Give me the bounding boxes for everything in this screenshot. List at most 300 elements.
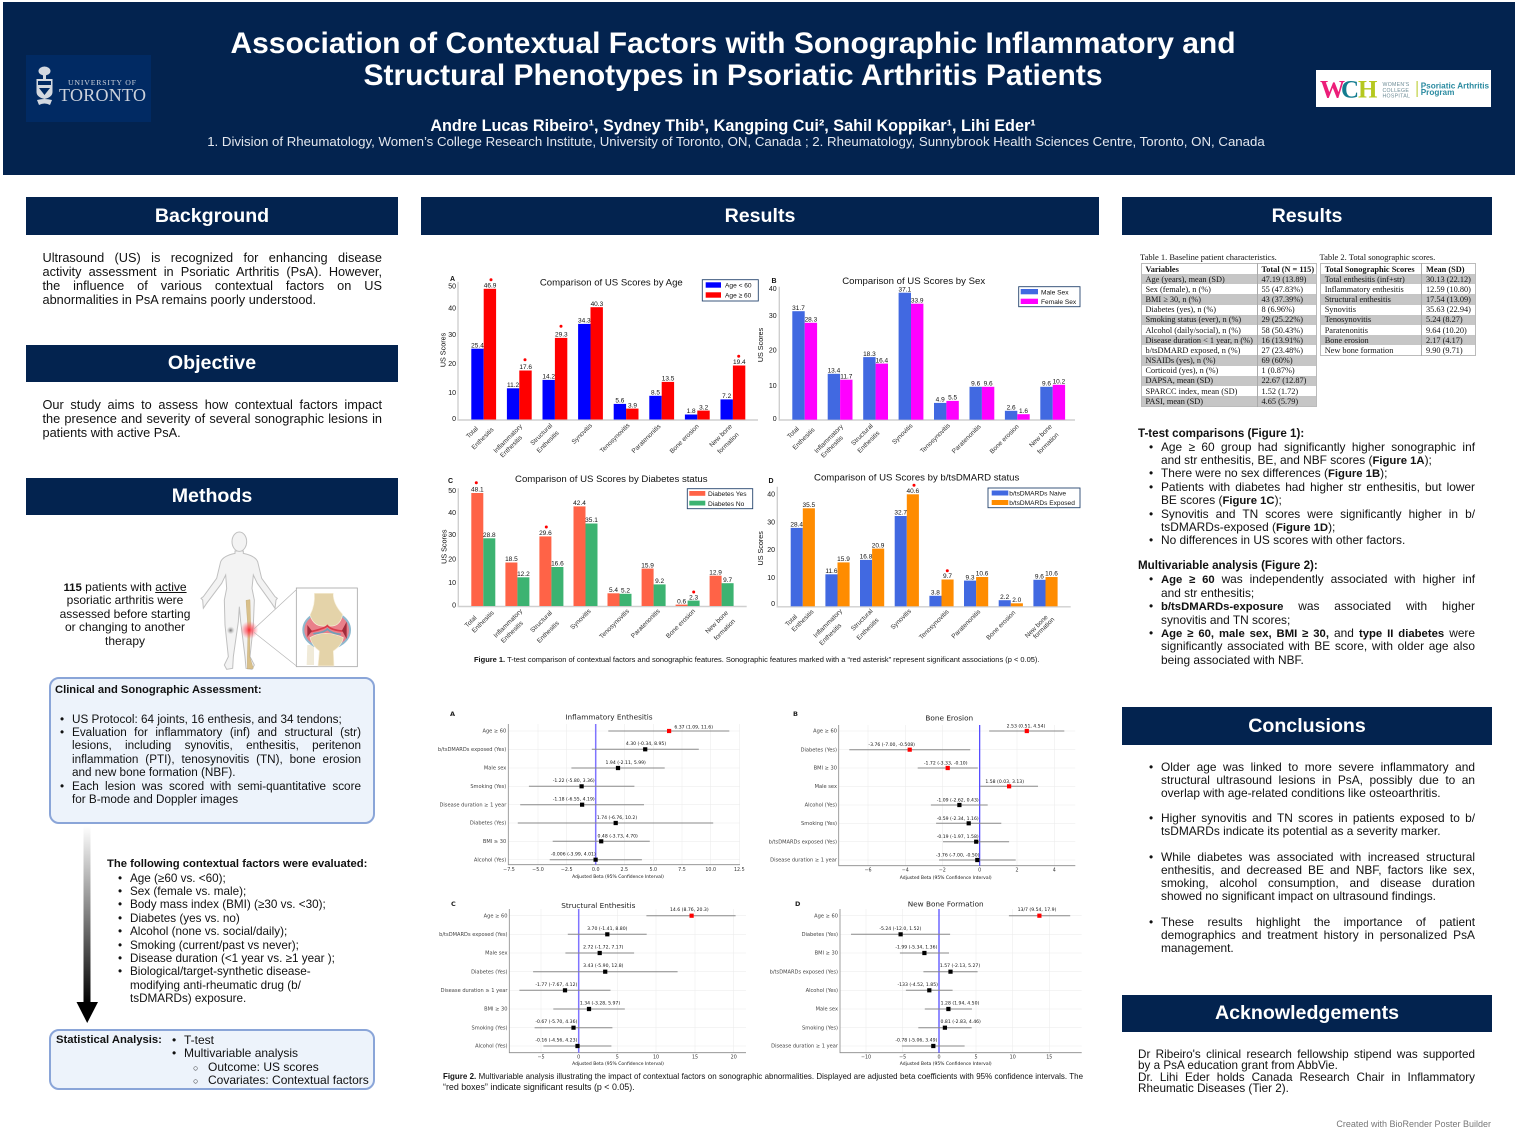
x ticks [537, 1054, 737, 1060]
zero reference line [979, 725, 981, 866]
grid [840, 909, 1082, 1053]
category labels: Enthesitis [820, 434, 845, 460]
axes [839, 725, 1075, 866]
table 1: baseline characteristics: Smoking status (ever), n (%) [1146, 315, 1241, 324]
assessment bullets: US Protocol: 64 joints, 16 enthesis, and 34 tendons; [72, 712, 342, 726]
heading: contextual factors: The following contextual factors were evaluated: [107, 858, 367, 870]
value labels: 9.6 [971, 380, 981, 388]
list: multivariable findings: Age ≥ 60 was independently associated with higher inf [1161, 572, 1475, 586]
y ticks: 0 [452, 416, 456, 423]
bar chart D: US scores by b/tsDMARD status [758, 472, 1080, 647]
value labels: 2.3 [689, 594, 698, 601]
title: Association of Contextual Factors with Sonographic Inflammatory and [230, 27, 1236, 60]
estimate labels: -0.16 (-4.56, 4.23) [535, 1038, 577, 1044]
panel letter: B [793, 710, 798, 718]
x ticks: 15 [692, 1054, 698, 1060]
legend: Male Sex [1041, 289, 1069, 296]
x ticks: −5.0 [532, 867, 544, 873]
heading: Conclusions [1122, 707, 1492, 745]
x axis label: Adjusted Beta (95% Confidence Interval) [572, 874, 664, 880]
row labels: b/tsDMARDs exposed (Yes) [769, 839, 837, 845]
x ticks: −7.5 [503, 867, 515, 873]
estimate labels: -3.76 (-7.00, -0.50) [936, 852, 980, 858]
value labels: 46.9 [484, 282, 497, 290]
chart title: Inflammatory Enthesitis [565, 712, 653, 722]
text: background: the influence of various contextual factors on US [42, 278, 382, 293]
non-significant estimates [901, 934, 951, 1046]
value labels [471, 282, 746, 415]
estimate labels: 6.37 (1.09, 11.6) [674, 724, 713, 730]
bars: age below 60 [471, 324, 733, 420]
category labels: Inflammatory [812, 607, 844, 639]
table 2: total sonographic scores: Mean (SD) [1426, 265, 1464, 274]
estimate labels [879, 907, 1057, 1044]
table 1: baseline characteristics: Variables [1146, 265, 1179, 274]
estimate labels: 3.70 (-1.41, 8.80) [587, 926, 628, 932]
authors: Andre Lucas Ribeiro¹, Sydney Thib¹, Kangping Cui², Sahil Koppikar¹, Lihi Eder¹ [430, 117, 1036, 135]
heading: Background [26, 197, 398, 235]
zero reference line [578, 909, 580, 1053]
table 1: baseline characteristics: SPARCC index, mean (SD) [1146, 387, 1237, 396]
estimate labels: -1.22 (-5.80, 3.36) [553, 778, 595, 784]
category labels: Structural [850, 422, 875, 447]
category labels [786, 422, 1061, 460]
table 1: baseline characteristics: Alcohol (daily/social), n (%) [1146, 326, 1241, 335]
y ticks: 30 [769, 313, 777, 320]
row labels: Age ≥ 60 [814, 913, 838, 919]
bars: b/tsDMARDs naive [791, 516, 1046, 606]
value labels: 29.6 [539, 530, 552, 537]
table 1: baseline characteristics [1140, 263, 1316, 407]
program name: Program [1421, 88, 1454, 97]
legend: b/tsDMARDs Naive [1009, 490, 1066, 498]
y ticks: 40 [769, 286, 777, 293]
category labels: Enthesitis [856, 616, 881, 642]
list: multivariable findings: significantly associated with BE score, with older age also [1161, 639, 1475, 653]
zero reference line [938, 909, 940, 1053]
category labels: New bone [1024, 614, 1050, 640]
list: conclusions: Older age was linked to more severe inflammatory and [1161, 760, 1475, 774]
row labels: Alcohol (Yes) [474, 857, 506, 863]
x ticks: −6 [864, 868, 872, 874]
list: contextual factors: modifying anti-rheumatic drug (b/ [130, 979, 301, 992]
value labels: 9.6 [984, 380, 993, 388]
y ticks [448, 488, 456, 610]
text: patient cohort: 115 patients with active [63, 580, 187, 594]
category labels [465, 422, 741, 459]
heading: Objective [26, 345, 398, 382]
y ticks: 50 [448, 283, 456, 290]
chart title: Comparison of US Scores by Sex [842, 276, 985, 287]
row labels: Diabetes (Yes) [471, 969, 508, 975]
table 1: baseline characteristics: 58 (50.43%) [1262, 326, 1303, 335]
list: conclusions: enthesitis, and decreased BE and NBF, factors like sex, [1161, 862, 1475, 876]
list: multivariable findings: Age ≥ 60, male sex, BMI ≥ 30, and type II diabetes were [1161, 626, 1475, 640]
value labels: 9.6 [1042, 380, 1051, 388]
inflammation glow [240, 621, 258, 639]
table 1: baseline characteristics: Age (years), mean (SD) [1146, 275, 1225, 284]
non-significant estimates [959, 805, 977, 860]
list: contextual factors: Diabetes (yes vs. no) [130, 912, 240, 925]
x ticks: 2 [1015, 868, 1019, 874]
hospital name: HOSPITAL [1382, 94, 1410, 100]
list: conclusions: structural ultrasound lesions in PsA, possibly due to an [1161, 772, 1475, 786]
row labels: Disease duration ≥ 1 year [770, 858, 838, 864]
row labels: b/tsDMARDs exposed (Yes) [439, 932, 508, 938]
value labels: 35.1 [585, 517, 598, 524]
category labels: Tenosynovitis [918, 608, 951, 641]
significant estimates [910, 731, 1027, 786]
value labels [792, 286, 1066, 415]
value labels: 18.5 [505, 556, 518, 563]
row labels: Age ≥ 60 [484, 913, 508, 919]
value labels: 42.4 [573, 500, 586, 507]
category labels: Enthesitis [792, 426, 817, 452]
value labels: 40.3 [591, 301, 604, 308]
value labels: 10.6 [976, 571, 989, 578]
value labels: 16.4 [875, 357, 889, 364]
bars: b/tsDMARDs exposed [803, 494, 1058, 606]
row labels: Smoking (Yes) [802, 1025, 838, 1031]
row labels: BMI ≥ 30 [484, 1007, 508, 1013]
y axis label: US Scores [438, 332, 448, 367]
category labels: Total [465, 425, 480, 440]
x ticks [864, 868, 1056, 874]
y ticks: 20 [448, 556, 456, 563]
value labels: 3.9 [628, 402, 637, 409]
panel: clinical and sonographic assessment [49, 677, 375, 824]
table 2: total sonographic scores: Tenosynovitis [1325, 315, 1371, 324]
x ticks: 5 [974, 1054, 978, 1060]
figure 2 caption: Figure 2. Multivariable analysis illustrating the impact of contextual factors on sonographic abnormalities. Displayed are adjusted beta coefficients with 95% confidence intervals. The [443, 1072, 1083, 1081]
y ticks: 0 [771, 601, 775, 608]
y ticks: 10 [767, 575, 775, 582]
estimate labels: 13/7 (9.54, 17.9) [1018, 907, 1057, 913]
row labels: BMI ≥ 30 [814, 766, 837, 772]
category labels: Bone erosion [989, 423, 1021, 455]
x ticks: 0 [978, 868, 981, 874]
y ticks: 10 [448, 390, 456, 397]
heading: Results centre [421, 197, 1099, 235]
text: objective: patients with active PsA. [42, 424, 181, 440]
y ticks: 10 [448, 580, 456, 587]
value labels: 31.7 [792, 305, 805, 312]
panel letter: D [795, 900, 801, 908]
estimate labels: 1.94 (-2.11, 5.99) [606, 760, 646, 766]
list: t-test findings: tsDMARDs-exposed (Figure 1D); [1161, 520, 1335, 534]
x ticks: 10.0 [705, 867, 716, 873]
row labels: b/tsDMARDs exposed (Yes) [438, 747, 506, 753]
estimate labels: 3.43 (-5.90, 12.8) [583, 963, 624, 969]
x ticks: −10 [861, 1054, 871, 1060]
assessment bullets [60, 712, 361, 806]
y ticks: 30 [448, 332, 456, 339]
list: t-test findings: No differences in US scores with other factors. [1161, 533, 1405, 547]
panel letter: A [450, 710, 455, 718]
estimate labels [535, 907, 709, 1044]
table 1: baseline characteristics: 47.19 (13.89) [1262, 275, 1306, 284]
title [230, 27, 1236, 92]
logo letters [1320, 76, 1378, 104]
value labels: 5.4 [609, 587, 618, 594]
legend [687, 489, 753, 509]
category labels: Tenosynovitis [599, 422, 632, 455]
list: contextual factors: Sex (female vs. male); [130, 885, 246, 898]
value labels: 28.4 [790, 522, 803, 529]
title: Structural Phenotypes in Psoriatic Arthritis Patients [363, 59, 1103, 92]
estimate labels: -1.18 (-6.55, 4.19) [553, 797, 595, 803]
table 2: total sonographic scores: Structural enthesitis [1325, 295, 1391, 304]
hospital name: COLLEGE [1382, 88, 1409, 94]
joint inset [296, 588, 357, 667]
value labels: 5.2 [621, 588, 630, 594]
chart title: Structural Enthesitis [561, 901, 636, 910]
bars: diabetes no [483, 524, 734, 606]
bars: diabetes yes [471, 493, 722, 606]
value labels: 28.3 [805, 316, 818, 324]
table 2: total sonographic scores: 5.24 (8.27) [1426, 315, 1463, 324]
value labels: 9.3 [965, 574, 975, 581]
estimate labels: 2.53 (0.51, 4.54) [1007, 724, 1046, 730]
x ticks: 10 [653, 1054, 659, 1060]
text: background: Ultrasound (US) is recognized for enhancing disease [42, 250, 382, 264]
estimate labels: 1.28 (1.94, 4.50) [941, 1000, 980, 1006]
heading: Results right: Results [1272, 204, 1342, 226]
assessment bullets: Evaluation for inflammatory (inf) and structural (str) [72, 726, 361, 739]
y axis label: US Scores [440, 529, 448, 564]
axes [509, 909, 746, 1053]
text: objective: the presence and severity of several sonographic lesions in [42, 410, 382, 426]
non-significant estimates [565, 934, 607, 1046]
table 1: baseline characteristics: 22.67 (12.87) [1262, 376, 1306, 385]
value labels: 32.7 [894, 510, 907, 517]
category labels: Structural [529, 609, 554, 634]
body silhouette [201, 532, 277, 669]
x ticks: 5.0 [649, 867, 657, 873]
row labels: Diabetes (Yes) [802, 932, 838, 938]
y ticks: 20 [769, 348, 777, 355]
text: patient cohort: assessed before starting [60, 606, 190, 620]
table 1: baseline characteristics: DAPSA, mean (SD) [1146, 376, 1213, 385]
leg bones [246, 600, 253, 669]
panel: statistical analysis [49, 1029, 375, 1090]
statistical methods: Outcome: US scores [208, 1060, 319, 1074]
icon: body with inflamed knee and joint inset [200, 532, 358, 670]
heading: Conclusions: Conclusions [1248, 714, 1366, 736]
x axis label: Adjusted Beta (95% Confidence Interval) [900, 1061, 992, 1067]
table 1: baseline characteristics: 4.65 (5.79) [1262, 397, 1298, 406]
program name [1421, 82, 1490, 97]
x ticks: 5 [616, 1054, 619, 1060]
value labels: 5.5 [948, 395, 957, 402]
assessment bullets: inflammation (PTI), tenosynovitis (TN), bone erosion [72, 753, 361, 766]
confidence intervals [849, 731, 1064, 860]
value labels: 18.3 [863, 351, 876, 358]
list: contextual factors [118, 872, 335, 1005]
panel heading: Statistical Analysis: [56, 1034, 162, 1046]
table 1: baseline characteristics: 27 (23.48%) [1262, 346, 1303, 355]
table 1: baseline characteristics: BMI ≥ 30, n (%) [1146, 295, 1201, 304]
table 1: baseline characteristics: PASI, mean (SD) [1146, 397, 1203, 406]
category labels: Enthesitis [500, 619, 525, 645]
significant estimates [689, 914, 694, 918]
estimate labels: 2.72 (-1.72, 7.17) [583, 944, 624, 950]
row labels [438, 729, 507, 863]
category labels: Inflammatory [493, 607, 525, 639]
row labels [770, 913, 839, 1050]
confidence intervals [519, 916, 736, 1046]
x ticks: 15 [1046, 1054, 1052, 1060]
row labels: Smoking (Yes) [472, 1025, 508, 1031]
estimate labels: -133 (-4.52, 1.85) [897, 982, 938, 988]
chart title: Bone Erosion [925, 713, 973, 722]
bars: male sex [792, 293, 1053, 420]
list: multivariable findings: and str enthesitis; [1161, 586, 1254, 600]
value labels: 1.8 [687, 408, 696, 415]
category labels: Enthesitis [791, 608, 816, 633]
assessment bullets: Each lesion was scored with semi-quantitative score [72, 780, 361, 793]
y ticks: 30 [767, 519, 775, 526]
estimate labels: -1.77 (-7.67, 4.12) [535, 982, 577, 988]
legend [988, 488, 1080, 508]
axes [840, 909, 1082, 1053]
table 1: baseline characteristics: Disease duration < 1 year, n (%) [1146, 336, 1253, 345]
bar chart A: US scores by age [438, 276, 759, 459]
text: objective: Our study aims to assess how contextual factors impact [42, 396, 382, 412]
estimate labels: 4.30 (-0.34, 8.95) [626, 741, 666, 747]
assessment bullets: and new bone formation (NBF). [72, 766, 236, 779]
axes [458, 488, 747, 606]
category labels: New bone [708, 423, 734, 449]
estimate labels: 1.57 (-2.13, 5.27) [940, 963, 980, 969]
figure 2 caption [443, 1072, 1083, 1092]
x ticks: 0.0 [592, 867, 600, 873]
y ticks: 20 [448, 361, 456, 368]
assessment bullets: lesions, including synovitis, enthesitis, peritenon [72, 739, 361, 752]
value labels: 35.5 [802, 502, 816, 509]
non-significant estimates [582, 749, 645, 860]
table 1: baseline characteristics: 8 (6.96%) [1262, 305, 1295, 314]
category labels: Total [786, 425, 801, 440]
grid [839, 725, 1075, 866]
heading: Acknowledgements: Acknowledgements [1215, 1002, 1399, 1024]
grid [509, 909, 746, 1053]
legend: Diabetes No [708, 501, 745, 508]
value labels: 12.2 [517, 571, 530, 578]
category labels: Synovitis [890, 607, 913, 631]
panel letter: A [450, 276, 455, 283]
hospital name [1382, 82, 1410, 100]
category labels: Bone erosion [665, 608, 697, 640]
list: conclusions: tsDMARDs indicate its potential as a severity marker. [1161, 824, 1441, 838]
logo letters: W [1320, 76, 1345, 104]
heading: multivariable analysis: Multivariable analysis (Figure 2): [1138, 559, 1318, 572]
row labels [769, 729, 838, 864]
category labels: Total [464, 614, 479, 629]
bar chart B: US scores by sex [756, 276, 1080, 460]
value labels: 15.9 [837, 556, 850, 563]
list: conclusions: management. [1161, 940, 1234, 954]
category labels: Synovitis [891, 422, 915, 446]
figure 1 caption: Figure 1. T-test comparison of contextual factors and sonographic features. Sonographic features marked with a “red asterisk” represent significant associations (p < 0.05). [474, 655, 1040, 664]
table 1: baseline characteristics: Corticoid (yes), n (%) [1146, 366, 1218, 375]
value labels: 34.3 [578, 318, 591, 325]
confidence intervals [518, 731, 729, 860]
text: patient cohort: or changing to another [65, 620, 185, 634]
axes [777, 487, 1071, 607]
logo wordmark: UNIVERSITY OF [68, 78, 137, 87]
text: objective [42, 396, 382, 440]
list: t-test findings: There were no sex differences (Figure 1B); [1161, 466, 1387, 480]
table 1: baseline characteristics: 55 (47.83%) [1262, 285, 1303, 294]
category labels: Paratenonitis [631, 423, 663, 455]
x ticks: 0 [577, 1054, 580, 1060]
list: conclusions: overlap with age-related conditions like osteoarthritis. [1161, 786, 1441, 800]
category labels: New bone [1028, 423, 1054, 449]
chart title: Comparison of US Scores by b/tsDMARD status [814, 472, 1020, 484]
y ticks: 50 [448, 488, 456, 495]
heading: Acknowledgements [1122, 995, 1492, 1032]
value labels: 5.6 [615, 398, 625, 405]
value labels: 10.2 [1053, 378, 1066, 386]
table 1: baseline characteristics: Sex (female), n (%) [1146, 285, 1211, 294]
x ticks: 10 [1010, 1054, 1016, 1060]
y ticks: 0 [452, 603, 456, 610]
table 2: total sonographic scores: Total Sonographic Scores [1325, 265, 1415, 274]
table 1: baseline characteristics: NSAIDs (yes), n (%) [1146, 356, 1216, 365]
affiliations: 1. Division of Rheumatology, Women’s College Research Institute, University of Toronto, ON, Canada ; 2. Rheumatology, Sunnybrook Health Sciences Centre, Toronto, ON, Canada [207, 134, 1265, 149]
list: contextual factors: Age (≥60 vs. <60); [130, 872, 226, 884]
chart title: New Bone Formation [908, 900, 984, 908]
category labels: Synovitis [571, 422, 594, 446]
row labels: Disease duration ≥ 1 year [439, 802, 507, 808]
category labels: Total [784, 613, 799, 628]
row labels: BMI ≥ 30 [483, 839, 506, 845]
bar chart C: US scores by diabetes status [440, 474, 754, 645]
value labels: 11.2 [507, 382, 520, 389]
category labels: Enthesitis [471, 426, 496, 451]
table 1: baseline characteristics: 16 (13.91%) [1262, 336, 1303, 345]
category labels: formation [1032, 616, 1056, 640]
arrow: flow to statistical analysis [76, 832, 98, 1023]
row labels: BMI ≥ 30 [815, 951, 838, 957]
list: multivariable findings [1150, 572, 1476, 667]
icon: crest [36, 66, 52, 105]
y ticks: 40 [448, 305, 456, 312]
x ticks: 4 [1053, 868, 1056, 874]
zoom lines [254, 590, 296, 666]
significance markers [475, 481, 695, 594]
row labels: Disease duration ≥ 1 year [771, 1044, 839, 1050]
list: multivariable findings: synovitis and TN scores; [1161, 613, 1290, 627]
table 1: baseline characteristics: 43 (37.39%) [1262, 295, 1303, 304]
table 1: baseline characteristics: 1.52 (1.72) [1262, 387, 1298, 396]
legend: Age < 60 [725, 283, 752, 290]
x ticks: 7.5 [678, 867, 686, 873]
axes [458, 282, 758, 420]
y ticks: 40 [448, 510, 456, 517]
panel letter: D [768, 478, 774, 485]
estimate labels: -3.76 (-7.00, -0.508) [868, 742, 915, 748]
list: contextual factors: Disease duration (<1 year vs. ≥1 year ); [130, 952, 335, 965]
value labels: 20.9 [872, 542, 885, 549]
category labels: Paratenonitis [630, 607, 662, 640]
significance markers [490, 278, 740, 361]
category labels: Bone erosion [985, 609, 1017, 642]
table 2: total sonographic scores: 2.17 (4.17) [1426, 336, 1463, 345]
row labels: Alcohol (Yes) [806, 988, 838, 994]
x axis label: Adjusted Beta (95% Confidence Interval) [900, 875, 992, 881]
